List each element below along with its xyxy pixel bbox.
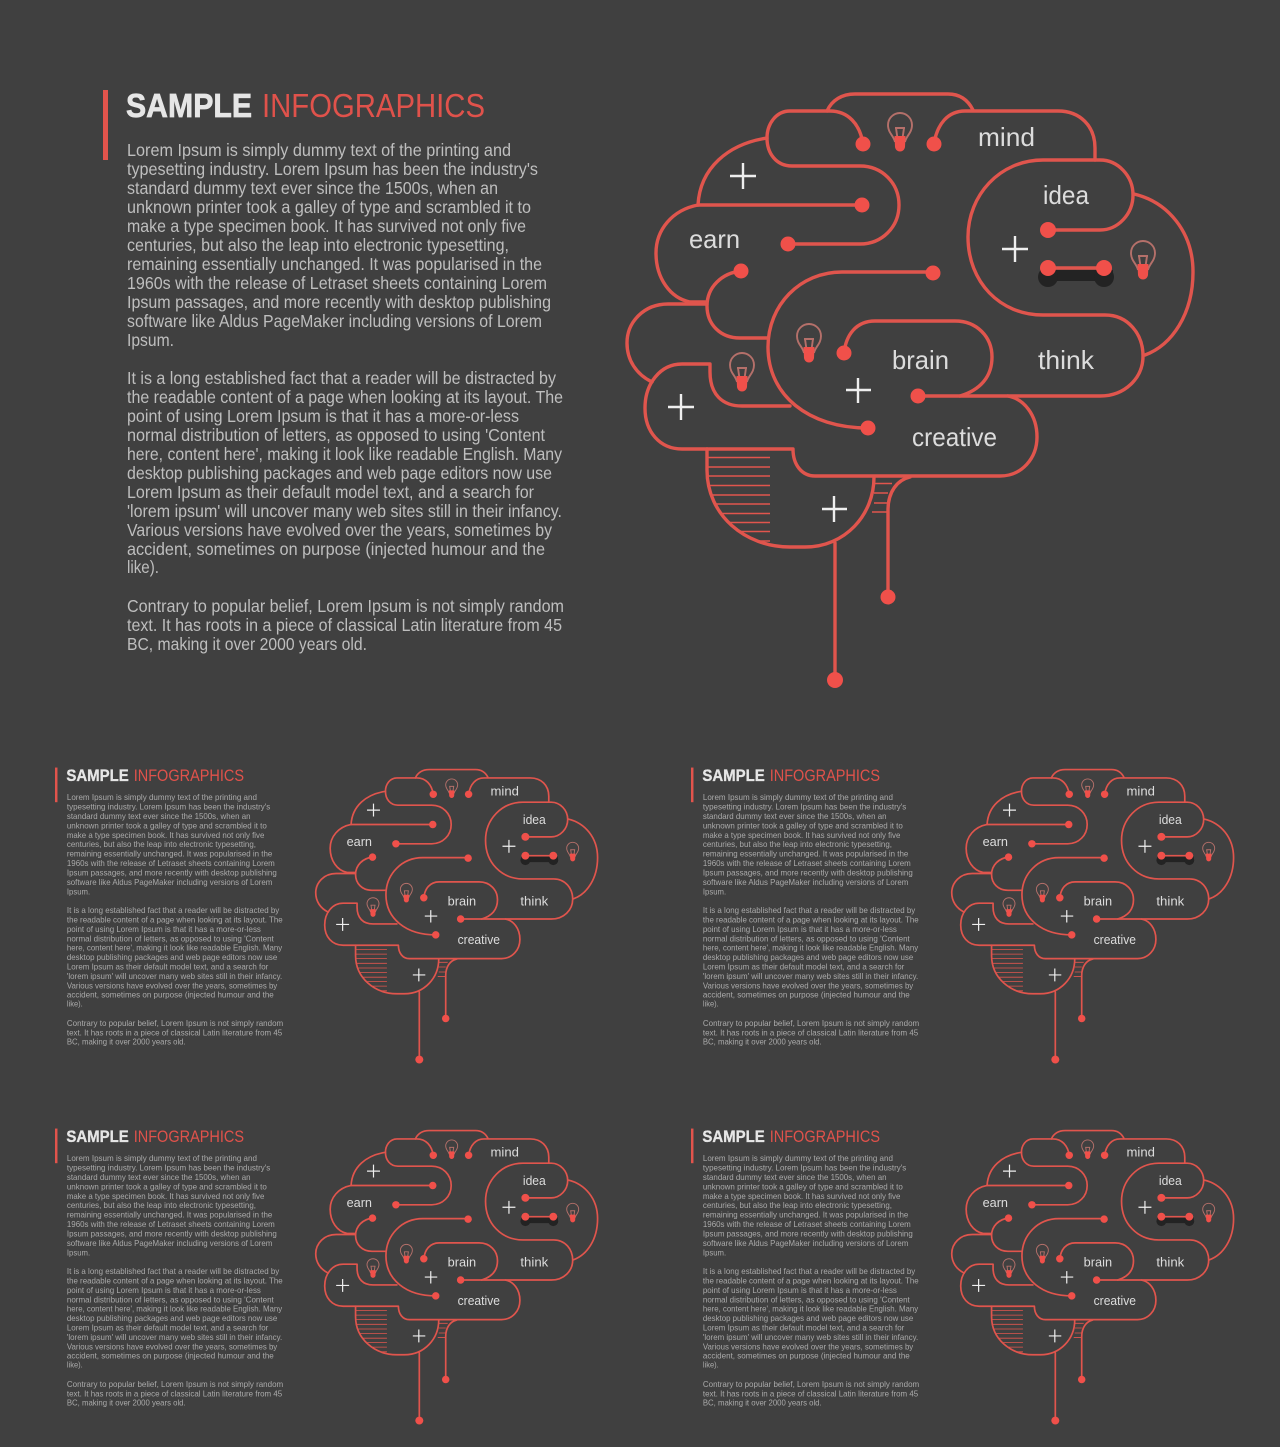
- brain labels: earn: [347, 1195, 372, 1210]
- body text: make a type specimen book. It has survived not only five: [703, 1191, 901, 1201]
- brain labels: [689, 122, 1095, 452]
- body text: unknown printer took a galley of type and scrambled it to: [127, 197, 531, 217]
- body text: make a type specimen book. It has survived not only five: [67, 1191, 265, 1201]
- body text: It is a long established fact that a reader will be distracted by: [127, 368, 556, 388]
- body text: normal distribution of letters, as opposed to using 'Content: [703, 933, 910, 943]
- body text: make a type specimen book. It has survived not only five: [127, 216, 526, 236]
- brain labels: earn: [983, 834, 1008, 849]
- body text: [703, 792, 919, 1047]
- body text: point of using Lorem Ipsum is that it has a more-or-less: [703, 1285, 898, 1295]
- body text: standard dummy text ever since the 1500s, when an: [703, 1172, 887, 1182]
- brain labels: mind: [1127, 1144, 1155, 1159]
- body text: point of using Lorem Ipsum is that it has a more-or-less: [703, 924, 898, 934]
- body text: Lorem Ipsum as their default model text, and a search for: [67, 1323, 268, 1333]
- body text: Ipsum passages, and more recently with desktop publishing: [703, 867, 913, 877]
- body text: Ipsum.: [127, 330, 174, 350]
- brain labels: think: [520, 1255, 549, 1270]
- body text: remaining essentially unchanged. It was popularised in the: [127, 254, 542, 274]
- accent bar: [55, 768, 57, 802]
- body text: here, content here', making it look like readable English. Many: [127, 444, 562, 464]
- body text: Lorem Ipsum is simply dummy text of the printing and: [127, 140, 511, 160]
- body text: unknown printer took a galley of type and scrambled it to: [703, 1181, 903, 1191]
- body text: Lorem Ipsum as their default model text, and a search for: [703, 962, 904, 972]
- title: INFOGRAPHICS: [134, 1128, 244, 1146]
- body text: typesetting industry. Lorem Ipsum has been the industry's: [67, 1163, 271, 1173]
- body text: standard dummy text ever since the 1500s, when an: [67, 811, 251, 821]
- body text: typesetting industry. Lorem Ipsum has been the industry's: [703, 1163, 907, 1173]
- body text: Contrary to popular belief, Lorem Ipsum is not simply random: [127, 596, 564, 616]
- body text: desktop publishing packages and web page editors now use: [703, 1313, 913, 1323]
- body text: Ipsum.: [703, 1247, 726, 1257]
- body text: [67, 1153, 283, 1408]
- body text: BC, making it over 2000 years old.: [703, 1037, 822, 1047]
- body text: normal distribution of letters, as opposed to using 'Content: [67, 933, 274, 943]
- body text: Ipsum.: [703, 886, 726, 896]
- title: INFOGRAPHICS: [770, 1128, 880, 1146]
- body text: standard dummy text ever since the 1500s, when an: [703, 811, 887, 821]
- body text: BC, making it over 2000 years old.: [127, 634, 367, 654]
- brain labels: mind: [491, 1144, 519, 1159]
- brain labels: think: [520, 894, 549, 909]
- body text: Lorem Ipsum as their default model text, and a search for: [127, 482, 534, 502]
- body text: typesetting industry. Lorem Ipsum has been the industry's: [127, 159, 538, 179]
- body text: BC, making it over 2000 years old.: [67, 1398, 186, 1408]
- body text: point of using Lorem Ipsum is that it has a more-or-less: [67, 1285, 262, 1295]
- body text: Various versions have evolved over the years, sometimes by: [67, 1341, 278, 1351]
- brain labels: think: [1156, 1255, 1185, 1270]
- body text: It is a long established fact that a reader will be distracted by: [67, 1266, 280, 1276]
- connector dots: [734, 136, 1056, 688]
- body text: Contrary to popular belief, Lorem Ipsum is not simply random: [67, 1379, 283, 1389]
- icon: bulb top: [888, 113, 912, 152]
- body text: centuries, but also the leap into electronic typesetting,: [67, 839, 256, 849]
- body text: the readable content of a page when looking at its layout. The: [703, 1275, 919, 1285]
- body text: software like Aldus PageMaker including versions of Lorem: [703, 877, 908, 887]
- brain labels: think: [1156, 894, 1185, 909]
- body text: desktop publishing packages and web page editors now use: [703, 952, 913, 962]
- body text: point of using Lorem Ipsum is that it has a more-or-less: [127, 406, 519, 426]
- body text: the readable content of a page when looking at its layout. The: [703, 914, 919, 924]
- brain labels: idea: [523, 812, 547, 827]
- body text: the readable content of a page when looking at its layout. The: [127, 387, 563, 407]
- body text: 'lorem ipsum' will uncover many web sites still in their infancy.: [67, 971, 282, 981]
- body text: 'lorem ipsum' will uncover many web sites still in their infancy.: [127, 501, 562, 521]
- toggle switch: [1038, 260, 1114, 287]
- brain labels: earn: [983, 1195, 1008, 1210]
- body text: Lorem Ipsum is simply dummy text of the printing and: [67, 1153, 257, 1163]
- body text: remaining essentially unchanged. It was popularised in the: [67, 849, 272, 859]
- accent bar: [103, 90, 108, 160]
- body text: like).: [127, 557, 159, 577]
- body text: here, content here', making it look like readable English. Many: [67, 1304, 283, 1314]
- brain labels: brain: [1084, 894, 1112, 909]
- body text: BC, making it over 2000 years old.: [67, 1037, 186, 1047]
- body text: centuries, but also the leap into electronic typesetting,: [127, 235, 509, 255]
- body text: Contrary to popular belief, Lorem Ipsum is not simply random: [703, 1018, 919, 1028]
- brain labels: idea: [523, 1173, 547, 1188]
- brain labels: idea: [1159, 812, 1183, 827]
- body text: [127, 140, 564, 654]
- body text: the readable content of a page when looking at its layout. The: [67, 1275, 283, 1285]
- body text: text. It has roots in a piece of classical Latin literature from 45: [67, 1388, 282, 1398]
- panel: small copy bottom left: [55, 1128, 598, 1425]
- title: INFOGRAPHICS: [770, 767, 880, 785]
- body text: Lorem Ipsum as their default model text, and a search for: [67, 962, 268, 972]
- body text: standard dummy text ever since the 1500s, when an: [127, 178, 498, 198]
- body text: text. It has roots in a piece of classical Latin literature from 45: [67, 1027, 282, 1037]
- body text: 'lorem ipsum' will uncover many web sites still in their infancy.: [703, 971, 918, 981]
- body text: like).: [67, 999, 83, 1009]
- brain labels: think: [1038, 345, 1095, 375]
- body text: text. It has roots in a piece of classical Latin literature from 45: [703, 1027, 918, 1037]
- body text: Ipsum passages, and more recently with desktop publishing: [703, 1228, 913, 1238]
- title: [702, 767, 880, 785]
- brain labels: [983, 1144, 1185, 1308]
- title: SAMPLE: [66, 767, 129, 785]
- body text: unknown printer took a galley of type and scrambled it to: [67, 1181, 267, 1191]
- hatching right: [872, 484, 892, 512]
- body text: software like Aldus PageMaker including versions of Lorem: [703, 1238, 908, 1248]
- body text: 1960s with the release of Letraset sheets containing Lorem: [67, 1219, 275, 1229]
- body text: 1960s with the release of Letraset sheets containing Lorem: [703, 1219, 911, 1229]
- body text: Various versions have evolved over the years, sometimes by: [67, 980, 278, 990]
- brain labels: idea: [1043, 180, 1090, 210]
- body text: unknown printer took a galley of type and scrambled it to: [703, 820, 903, 830]
- body text: centuries, but also the leap into electronic typesetting,: [67, 1200, 256, 1210]
- body text: desktop publishing packages and web page editors now use: [127, 463, 552, 483]
- brain labels: mind: [1127, 783, 1155, 798]
- body text: unknown printer took a galley of type and scrambled it to: [67, 820, 267, 830]
- body text: Lorem Ipsum as their default model text, and a search for: [703, 1323, 904, 1333]
- title: SAMPLE: [126, 87, 252, 124]
- panel: small copy bottom right: [691, 1128, 1234, 1425]
- title: SAMPLE: [66, 1128, 129, 1146]
- body text: normal distribution of letters, as opposed to using 'Content: [127, 425, 545, 445]
- body text: standard dummy text ever since the 1500s, when an: [67, 1172, 251, 1182]
- brain labels: creative: [458, 1293, 500, 1308]
- body text: Lorem Ipsum is simply dummy text of the printing and: [67, 792, 257, 802]
- brain labels: creative: [912, 422, 997, 452]
- body text: make a type specimen book. It has survived not only five: [67, 830, 265, 840]
- body text: centuries, but also the leap into electronic typesetting,: [703, 1200, 892, 1210]
- body text: 1960s with the release of Letraset sheets containing Lorem: [703, 858, 911, 868]
- brain outline circuit lines: [627, 94, 1193, 680]
- body text: like).: [703, 999, 719, 1009]
- body text: software like Aldus PageMaker including versions of Lorem: [67, 877, 272, 887]
- brain labels: mind: [978, 122, 1035, 152]
- title: SAMPLE: [702, 1128, 765, 1146]
- body text: [67, 792, 283, 1047]
- body text: accident, sometimes on purpose (injected humour and the: [67, 1351, 274, 1361]
- body text: Ipsum passages, and more recently with desktop publishing: [67, 867, 277, 877]
- body text: Contrary to popular belief, Lorem Ipsum is not simply random: [703, 1379, 919, 1389]
- plus icons: [668, 163, 1028, 522]
- brain labels: earn: [689, 224, 740, 254]
- body text: It is a long established fact that a reader will be distracted by: [703, 905, 916, 915]
- panel: small copy top right: [691, 767, 1234, 1064]
- brain labels: brain: [892, 345, 949, 375]
- icon: bulb centre: [797, 324, 821, 362]
- title: [126, 87, 485, 124]
- title: [702, 1128, 880, 1146]
- body text: here, content here', making it look like readable English. Many: [67, 943, 283, 953]
- body text: like).: [703, 1360, 719, 1370]
- body text: 'lorem ipsum' will uncover many web sites still in their infancy.: [67, 1332, 282, 1342]
- body text: desktop publishing packages and web page editors now use: [67, 1313, 277, 1323]
- brain labels: [347, 783, 549, 947]
- body text: Various versions have evolved over the years, sometimes by: [703, 980, 914, 990]
- brain labels: creative: [1094, 932, 1136, 947]
- body text: It is a long established fact that a reader will be distracted by: [703, 1266, 916, 1276]
- title: INFOGRAPHICS: [134, 767, 244, 785]
- hatching left: [700, 458, 770, 541]
- body text: 'lorem ipsum' will uncover many web sites still in their infancy.: [703, 1332, 918, 1342]
- icon: bulb right: [1131, 241, 1155, 280]
- body text: remaining essentially unchanged. It was popularised in the: [67, 1210, 272, 1220]
- body text: remaining essentially unchanged. It was popularised in the: [703, 849, 908, 859]
- body text: typesetting industry. Lorem Ipsum has been the industry's: [67, 802, 271, 812]
- accent bar: [691, 1129, 693, 1163]
- body text: accident, sometimes on purpose (injected humour and the: [703, 990, 910, 1000]
- body text: Ipsum passages, and more recently with desktop publishing: [127, 292, 551, 312]
- body text: software like Aldus PageMaker including versions of Lorem: [67, 1238, 272, 1248]
- brain diagram: [627, 94, 1193, 688]
- icon: bulb left: [730, 353, 754, 392]
- body text: 1960s with the release of Letraset sheets containing Lorem: [127, 273, 547, 293]
- body text: typesetting industry. Lorem Ipsum has been the industry's: [703, 802, 907, 812]
- accent bar: [55, 1129, 57, 1163]
- body text: software like Aldus PageMaker including versions of Lorem: [127, 311, 542, 331]
- body text: the readable content of a page when looking at its layout. The: [67, 914, 283, 924]
- body text: make a type specimen book. It has survived not only five: [703, 830, 901, 840]
- body text: accident, sometimes on purpose (injected humour and the: [127, 539, 545, 559]
- brain labels: [347, 1144, 549, 1308]
- body text: accident, sometimes on purpose (injected humour and the: [67, 990, 274, 1000]
- body text: Various versions have evolved over the years, sometimes by: [127, 520, 552, 540]
- brain labels: brain: [448, 1255, 476, 1270]
- body text: here, content here', making it look like readable English. Many: [703, 1304, 919, 1314]
- panel: small copy top left: [55, 767, 598, 1064]
- body text: text. It has roots in a piece of classical Latin literature from 45: [703, 1388, 918, 1398]
- brain labels: idea: [1159, 1173, 1183, 1188]
- title: [66, 767, 244, 785]
- body text: Various versions have evolved over the years, sometimes by: [703, 1341, 914, 1351]
- body text: 1960s with the release of Letraset sheets containing Lorem: [67, 858, 275, 868]
- brain labels: mind: [491, 783, 519, 798]
- body text: desktop publishing packages and web page editors now use: [67, 952, 277, 962]
- body text: like).: [67, 1360, 83, 1370]
- body text: accident, sometimes on purpose (injected humour and the: [703, 1351, 910, 1361]
- body text: text. It has roots in a piece of classical Latin literature from 45: [127, 615, 562, 635]
- title: [66, 1128, 244, 1146]
- body text: here, content here', making it look like readable English. Many: [703, 943, 919, 953]
- body text: remaining essentially unchanged. It was popularised in the: [703, 1210, 908, 1220]
- body text: centuries, but also the leap into electronic typesetting,: [703, 839, 892, 849]
- body text: Ipsum.: [67, 886, 90, 896]
- body text: normal distribution of letters, as opposed to using 'Content: [67, 1294, 274, 1304]
- body text: Contrary to popular belief, Lorem Ipsum is not simply random: [67, 1018, 283, 1028]
- brain labels: creative: [1094, 1293, 1136, 1308]
- brain labels: [983, 783, 1185, 947]
- brain diagram: [316, 770, 598, 1064]
- title: SAMPLE: [702, 767, 765, 785]
- body text: Ipsum passages, and more recently with desktop publishing: [67, 1228, 277, 1238]
- body text: [703, 1153, 919, 1408]
- brain labels: earn: [347, 834, 372, 849]
- body text: Ipsum.: [67, 1247, 90, 1257]
- body text: BC, making it over 2000 years old.: [703, 1398, 822, 1408]
- body text: It is a long established fact that a reader will be distracted by: [67, 905, 280, 915]
- body text: normal distribution of letters, as opposed to using 'Content: [703, 1294, 910, 1304]
- body text: point of using Lorem Ipsum is that it has a more-or-less: [67, 924, 262, 934]
- brain diagram: [952, 770, 1234, 1064]
- body text: Lorem Ipsum is simply dummy text of the printing and: [703, 792, 893, 802]
- title: INFOGRAPHICS: [262, 87, 485, 124]
- brain diagram: [952, 1131, 1234, 1425]
- panel: main infographic: [103, 87, 1193, 688]
- brain labels: brain: [448, 894, 476, 909]
- brain labels: creative: [458, 932, 500, 947]
- brain diagram: [316, 1131, 598, 1425]
- brain labels: brain: [1084, 1255, 1112, 1270]
- accent bar: [691, 768, 693, 802]
- body text: Lorem Ipsum is simply dummy text of the printing and: [703, 1153, 893, 1163]
